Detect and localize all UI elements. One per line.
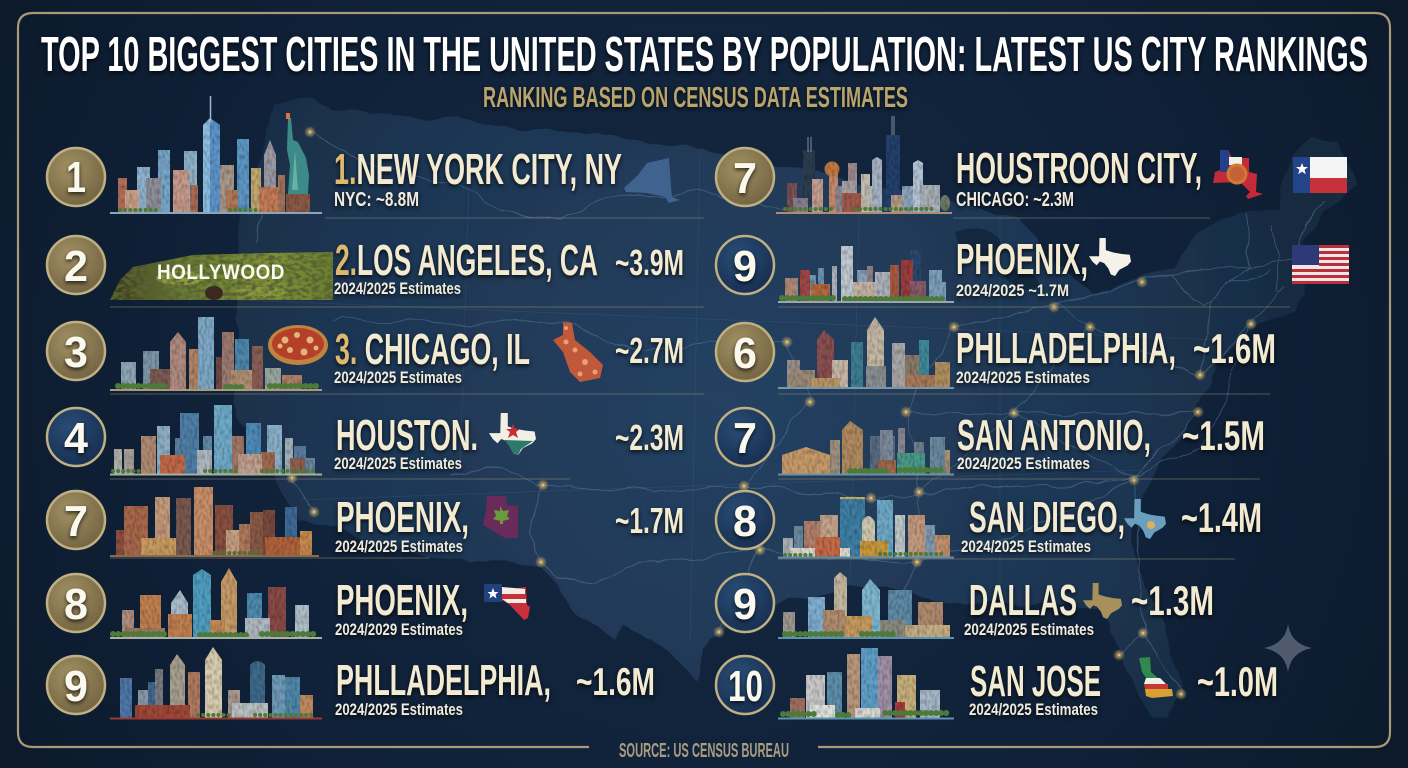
row 3: Chicago — [47, 317, 684, 391]
city name: San Diego: SAN DIEGO, — [969, 493, 1125, 542]
skyline: Houston — [110, 405, 322, 476]
icon: Texas tan — [1083, 583, 1122, 619]
rank badge 4: 4 — [64, 414, 89, 463]
city name: Los Angeles, CA: 2.LOS ANGELES, CA — [335, 236, 598, 285]
rank badge 9 — [716, 236, 774, 294]
city name: Phoenix: PHOENIX, — [956, 235, 1088, 284]
rank badge 10: 10 — [728, 662, 763, 711]
icon: Illinois pizza map — [553, 322, 603, 382]
icon: pizza — [268, 325, 328, 365]
rank badge 8 — [716, 491, 774, 549]
rank badge 8: 8 — [64, 580, 88, 629]
subtitle: RANKING BASED ON CENSUS DATA ESTIMATES — [483, 82, 908, 114]
source note: SOURCE: US CENSUS BUREAU — [619, 740, 789, 762]
city name: San Antonio: SAN ANTONIO, — [957, 411, 1151, 460]
icon: Texas white and green — [489, 413, 536, 455]
population: San Antonio: ~1.5M — [1182, 412, 1265, 459]
icon: New York pizza map — [1213, 150, 1263, 199]
skyline: Phoenix variant — [110, 568, 322, 639]
map of the United States — [235, 98, 1357, 720]
note: estimates: 2024/2025 Estimates — [334, 454, 462, 473]
skyline: New York with Statue of Liberty — [110, 96, 322, 214]
scene: Hollywood hill — [110, 252, 333, 300]
note: estimates: 2024/2025 Estimates — [964, 620, 1094, 639]
city name: New York City, NY: 1.NEW YORK CITY, NY — [334, 145, 622, 194]
city name: Philadelphia: PHLLADELPHIA, — [956, 324, 1176, 373]
row 5: Phoenix — [47, 487, 684, 557]
population: Houston: ~2.3M — [615, 417, 684, 458]
icon: New York state — [624, 158, 680, 203]
skyline: Dallas — [778, 572, 954, 639]
skyline: San Jose — [778, 648, 954, 720]
city name: San Jose: SAN JOSE — [970, 657, 1101, 706]
note: estimates: 2024/2025 Estimates — [335, 537, 463, 556]
note: estimates: 2024/2025 Estimates — [961, 537, 1091, 556]
city name: Phoenix repeat: PHOENIX, — [336, 576, 468, 625]
skyline: Chicago towers — [776, 116, 952, 214]
city name: Phoenix: PHOENIX, — [336, 493, 469, 542]
population: Los Angeles: ~3.9M — [615, 242, 684, 283]
population: Philadelphia: ~1.6M — [576, 661, 655, 704]
rank badge 6: 6 — [733, 329, 757, 378]
skyline: San Diego — [778, 497, 954, 558]
rank badge 9: 9 — [733, 242, 757, 291]
rank badge 7: 7 — [733, 154, 757, 203]
rank badge 2 — [47, 236, 105, 294]
skyline: Phoenix — [110, 487, 319, 557]
right row 4: San Antonio — [716, 408, 1265, 476]
right row 5: San Diego — [716, 491, 1262, 558]
icon: Texas flag — [1293, 157, 1347, 193]
city name: Houston: HOUSTON. — [336, 411, 478, 460]
rank badge 9 — [716, 574, 774, 632]
row 6: Phoenix repeat — [47, 568, 530, 639]
right row 2: Phoenix — [716, 235, 1349, 303]
rank badge 3 — [47, 322, 105, 380]
population: San Diego: ~1.4M — [1181, 494, 1262, 541]
rank badge 8 — [47, 574, 105, 632]
note: estimates: 2024/2025 Estimates — [956, 368, 1090, 387]
rank badge 7 — [716, 408, 774, 466]
rank badge 7 — [716, 148, 774, 206]
rank badge 1 — [47, 148, 105, 206]
note: estimates: 2024/2025 Estimates — [335, 700, 463, 719]
city name: Dallas: DALLAS — [969, 576, 1077, 625]
population: Dallas: ~1.3M — [1131, 577, 1214, 624]
right row 1: Houstroon City — [716, 116, 1347, 214]
note: estimates: 2024/2025 Estimates — [334, 368, 462, 387]
note: estimates: 2024/2025 Estimates — [969, 700, 1098, 719]
scene: Hollywood hill: HOLLYWOOD — [157, 261, 285, 284]
rank badge 8: 8 — [733, 497, 757, 546]
skyline: Philadelphia — [110, 647, 322, 720]
row 7: Philadelphia — [47, 647, 655, 720]
population: Phoenix: ~1.7M — [615, 500, 684, 541]
icon: Texas blue — [1124, 499, 1166, 539]
rank badge 4 — [47, 408, 105, 466]
population: Chicago: CHICAGO: ~2.3M — [956, 189, 1074, 211]
right row 6: Dallas — [716, 572, 1214, 639]
rank badge 3: 3 — [64, 328, 88, 377]
population: NYC: NYC: ~8.8M — [334, 189, 419, 211]
icon: Arizona — [483, 496, 518, 538]
rank badge 1: 1 — [66, 153, 86, 202]
city name: Houstroon City: HOUSTROON CITY, — [956, 144, 1202, 193]
icon: US flag — [1292, 245, 1349, 284]
sparkle icon — [1264, 624, 1312, 672]
rank badge 7: 7 — [733, 414, 757, 463]
right row 3: Philadelphia — [716, 317, 1276, 389]
population: Philadelphia: ~1.6M — [1193, 325, 1276, 372]
row 2: Los Angeles — [47, 236, 684, 300]
note: estimates: 2024/2029 Estimates — [335, 620, 463, 639]
rank badge 7 — [47, 491, 105, 549]
note: estimates: 2024/2025 Estimates — [957, 454, 1090, 473]
rank badge 9 — [47, 656, 105, 714]
rank badge 6 — [716, 323, 774, 381]
icon: California coloured — [1139, 657, 1173, 698]
skyline: Phoenix — [778, 246, 954, 303]
skyline: Chicago — [110, 317, 322, 391]
row 1: New York City — [47, 96, 680, 214]
rank badge 9: 9 — [64, 662, 88, 711]
city name: Chicago, IL: 3. CHICAGO, IL — [335, 325, 530, 374]
skyline: San Antonio — [778, 421, 954, 476]
row 4: Houston — [47, 405, 684, 476]
rank badge 9: 9 — [733, 580, 757, 629]
right row 7: San Jose — [716, 648, 1278, 720]
rank badge 7: 7 — [64, 497, 88, 546]
population: San Jose: ~1.0M — [1197, 658, 1278, 705]
icon: Texas flag shape — [484, 584, 530, 620]
icon: Texas white — [1089, 238, 1131, 276]
city name: Philadelphia: PHLLADELPHIA, — [336, 656, 551, 705]
population: Chicago: ~2.7M — [615, 330, 684, 371]
rank badge 10 — [716, 656, 774, 714]
skyline: Philadelphia — [778, 317, 954, 389]
population: Phoenix estimate: 2024/2025 ~1.7M — [956, 281, 1069, 300]
note: estimates: 2024/2025 Estimates — [334, 279, 461, 298]
rank badge 2: 2 — [64, 242, 88, 291]
